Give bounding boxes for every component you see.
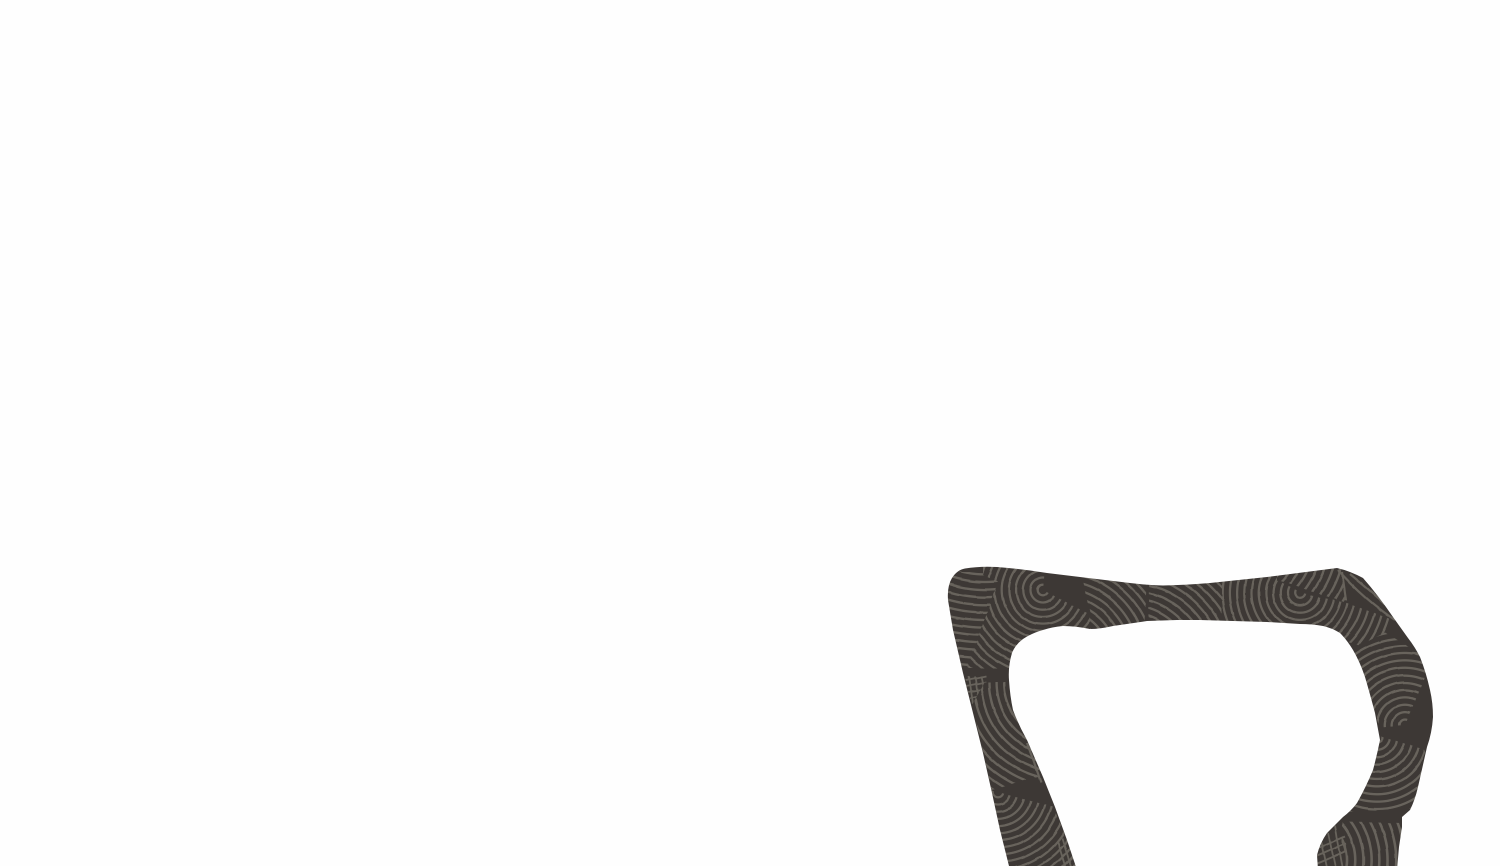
patch: top band arcs middle — [1148, 582, 1222, 621]
patch: top right near-vertical lines — [1277, 568, 1345, 602]
patch: right side lower arcs — [1349, 736, 1426, 812]
patch: top right corner strokes — [1338, 570, 1395, 620]
patch: left side arcs — [972, 682, 1045, 790]
patch: top-left corner lines — [948, 572, 998, 666]
patch: lower left arcs — [992, 790, 1076, 866]
patch: arcs right of centre — [1295, 594, 1390, 646]
patch: top-left concentric arcs — [968, 560, 1090, 668]
patch: top band arcs left — [1084, 578, 1147, 629]
patch: bottom right crosshatch — [1316, 825, 1346, 866]
patch: top band arcs around right centre — [1222, 576, 1299, 624]
patch: left side long stroke — [1027, 743, 1041, 782]
patch: lower left hatching — [1058, 838, 1072, 866]
patch: left crosshatch — [966, 676, 986, 704]
patch: right side concentric arcs — [1354, 632, 1426, 728]
patch: bottom right arcs — [1342, 822, 1405, 866]
illustration: textured dark frame — [948, 566, 1433, 866]
frame shape with line texture — [948, 566, 1433, 866]
frame base fill — [958, 566, 1433, 866]
